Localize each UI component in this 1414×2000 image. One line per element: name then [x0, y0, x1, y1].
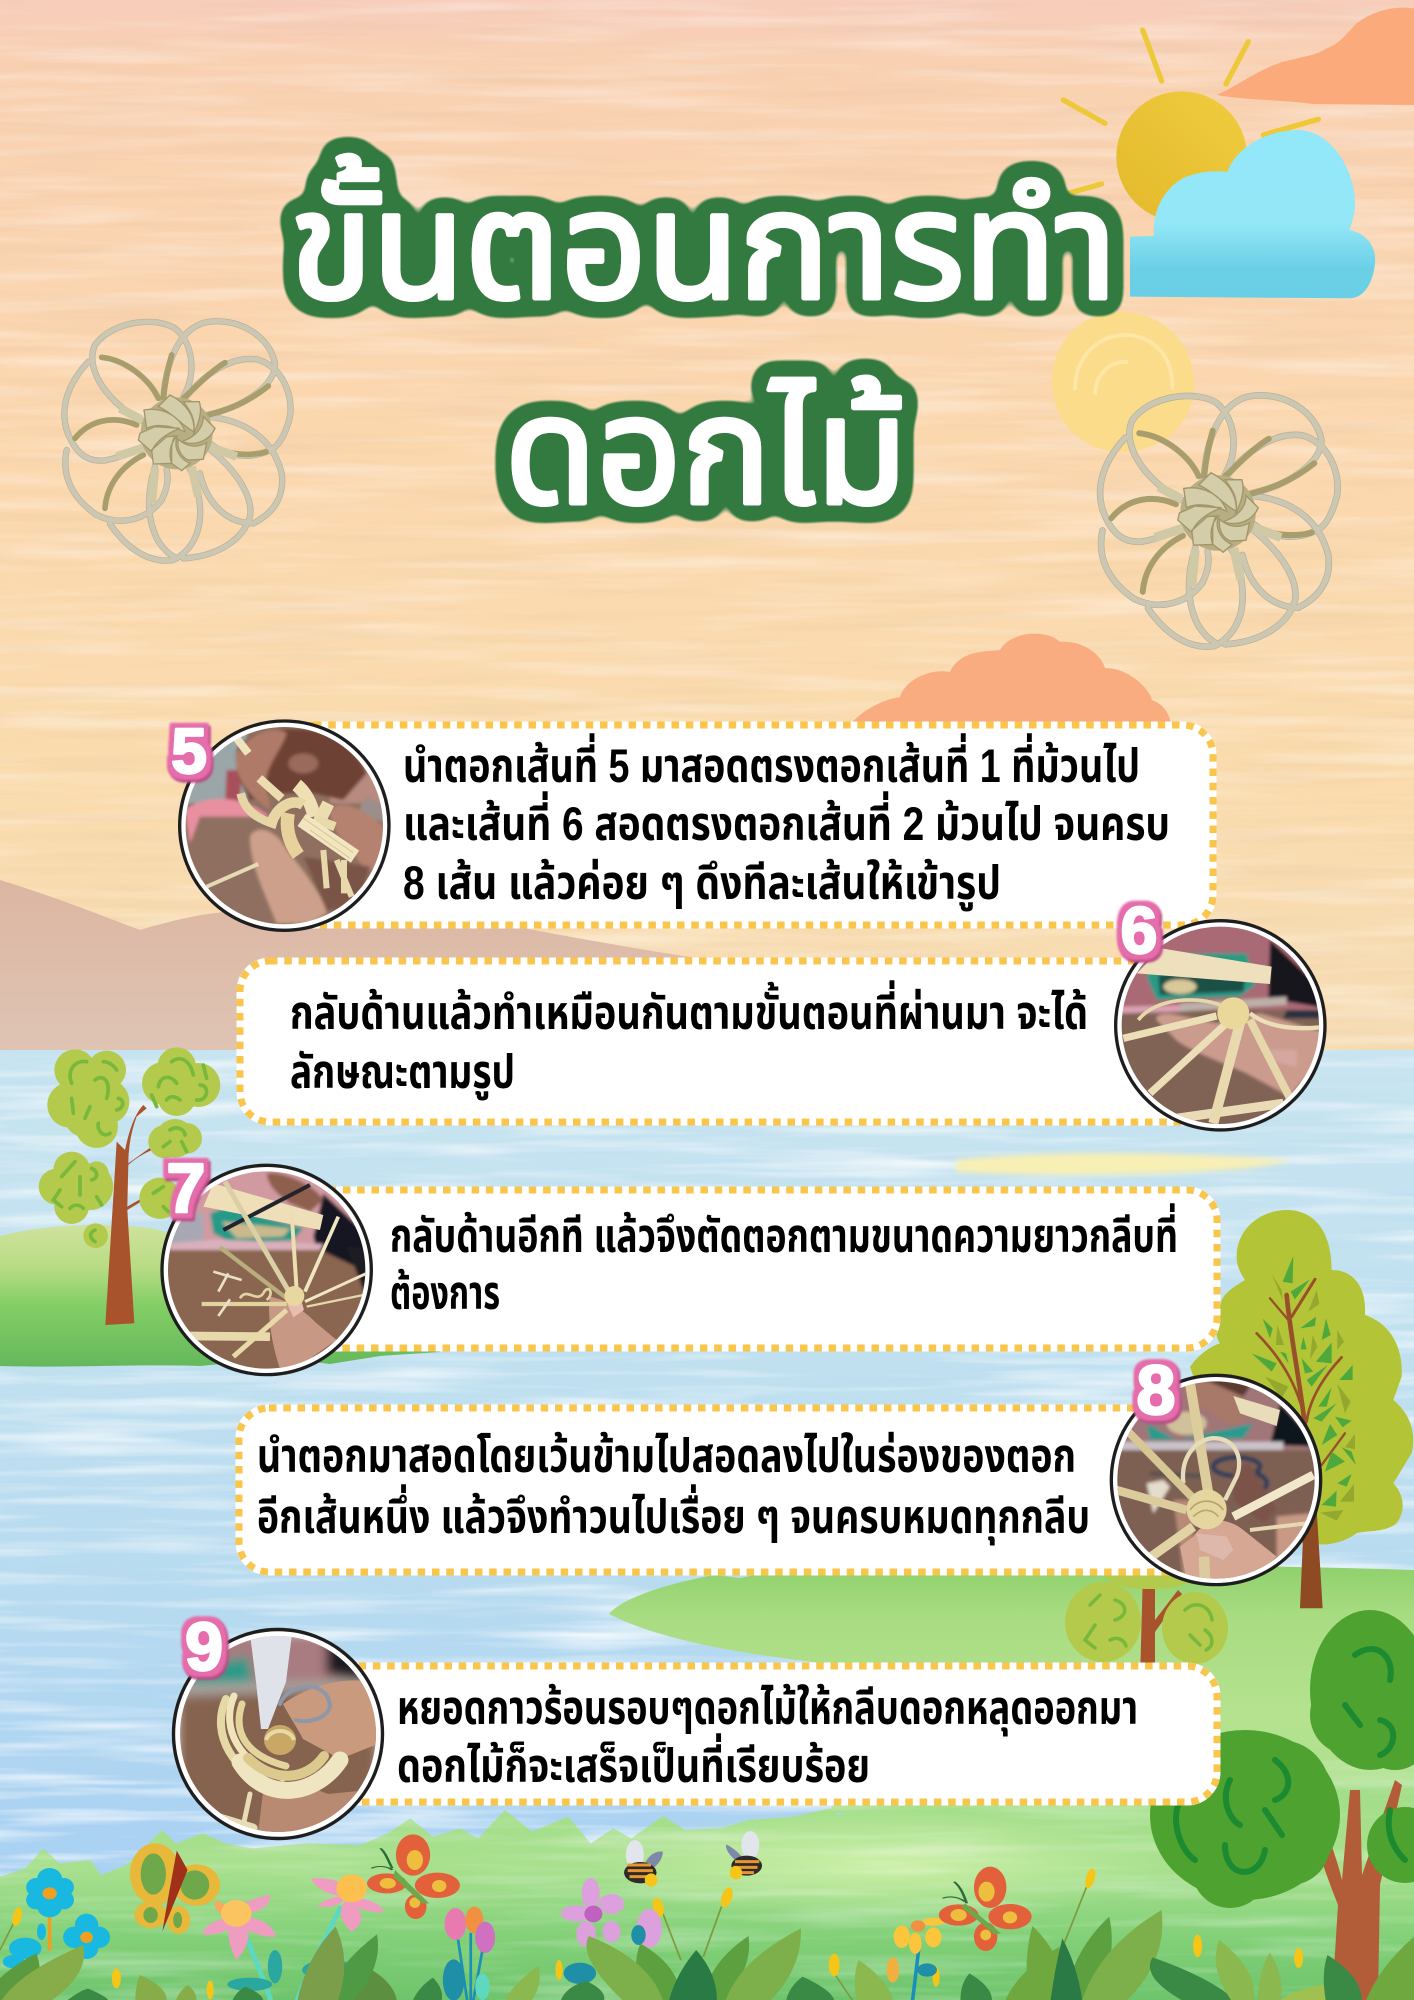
panel: step 6 [240, 961, 1230, 1122]
icon: pale yellow sun [1052, 312, 1194, 452]
step 6 card [240, 961, 1230, 1122]
leaves foreground [0, 1910, 1414, 2000]
panel: step 8 [239, 1408, 1229, 1572]
step 6 text: ลักษณะตามรูป [290, 1045, 515, 1100]
icon: woven flower left [64, 321, 291, 561]
step 5 text [403, 733, 1170, 911]
flower: pink with yellow tulip [311, 1878, 383, 1932]
badge: number 6: 6 [1121, 893, 1157, 967]
photo: step 5 hands weaving [180, 720, 393, 933]
badge: number 7: 7 [167, 1149, 205, 1227]
step 5 text: 8 เส้น แล้วค่อย ๆ ดึงทีละเส้นให้เข้ารูป [403, 856, 1001, 911]
background: right river bank [609, 1565, 1414, 1900]
background: bottom meadow [0, 1780, 1414, 2000]
step 9 text: ดอกไม้ก็จะเสร็จเป็นที่เรียบร้อย [397, 1733, 870, 1792]
yellow spikes [11, 1868, 1303, 1999]
illustration: bottom-right green tree [1150, 1610, 1414, 2000]
background: painted peach sky [0, 0, 1414, 1056]
photo: step 7 cutting strips [160, 1163, 377, 1378]
flowers: tulips [445, 1907, 495, 1953]
background: water brush texture [0, 1050, 1414, 2000]
step 5 card [284, 725, 1213, 925]
photo: step 9 gluing flower [174, 1630, 382, 1838]
texture: land brush strokes [0, 1760, 1414, 2000]
step 7 card [270, 1190, 1217, 1348]
title [290, 155, 1117, 535]
background: pale yellow water streak [956, 1153, 1290, 1175]
flower: yellow [886, 1918, 944, 1983]
step 7 text: กลับด้านอีกที แล้วจึงตัดตอกตามขนาดความยาวกลีบที่ [390, 1203, 1178, 1262]
step 6 text: กลับด้านแล้วทำเหมือนกันตามขั้นตอนที่ผ่านมา จะได้ [290, 980, 1088, 1039]
badge: number 8: 8 [1137, 1351, 1175, 1429]
step 7 text: ต้องการ [390, 1266, 500, 1319]
illustration: right tall tree [1190, 1210, 1413, 1608]
butterfly: orange one [367, 1834, 460, 1919]
title line 2: ดอกไม้ [505, 367, 907, 535]
illustration: small tree behind step 9 [1065, 1561, 1228, 1680]
background: sky brush texture [0, 0, 1414, 1056]
teal leaves [227, 1925, 937, 2000]
background: left river bank [0, 1225, 440, 1367]
panel: step 5 [284, 725, 1213, 925]
illustration: bottom garden [0, 1831, 1414, 2000]
bees [624, 1831, 762, 1887]
flowers: blue [3, 1868, 110, 1968]
background: meadow glow [580, 1810, 1180, 1920]
panel: step 7 [270, 1190, 1217, 1348]
cloud: top-right orange [1217, 8, 1414, 105]
stems and spikes [0, 1887, 1087, 2000]
photo: step 6 flower back [1113, 921, 1327, 1137]
badge: number 9: 9 [185, 1609, 223, 1685]
butterfly: yellow [130, 1843, 220, 1934]
step 8 text [257, 1429, 1090, 1545]
butterfly: orange two [939, 1867, 1032, 1951]
background: distant mountains [0, 880, 960, 1056]
step 8 text: นำตอกมาสอดโดยเว้นข้ามไปสอดลงไปในร่องของตอก [257, 1429, 1076, 1482]
title line 1: ขั้นตอนการทำ [290, 155, 1117, 330]
step 9 text [397, 1681, 1138, 1792]
icon: blue cloud [1130, 130, 1375, 298]
step 5 text: และเส้นที่ 6 สอดตรงตอกเส้นที่ 2 ม้วนไป จนครบ [403, 791, 1170, 850]
step 6 text [290, 980, 1088, 1100]
step 7 text [390, 1203, 1178, 1319]
background: river water [0, 1050, 1414, 2000]
step 9 card [300, 1666, 1217, 1802]
step 5 text: นำตอกเส้นที่ 5 มาสอดตรงตอกเส้นที่ 1 ที่ม้วนไป [403, 733, 1140, 792]
step 8 text: อีกเส้นหนึ่ง แล้วจึงทำวนไปเรื่อย ๆ จนครบหมดทุกกลีบ [257, 1484, 1090, 1545]
flower: purple [561, 1878, 662, 1948]
step 9 text: หยอดกาวร้อนรอบๆดอกไม้ให้กลีบดอกหลุดออกมา [397, 1681, 1138, 1736]
illustration: left tree [39, 1047, 220, 1325]
icon: woven flower right [1100, 395, 1338, 647]
cloud: middle orange [848, 634, 1173, 740]
badge: number 5: 5 [171, 715, 207, 787]
photo: step 8 looping strips [1110, 1373, 1323, 1585]
step 8 card [239, 1408, 1229, 1572]
icon: sun with rays [1063, 30, 1318, 222]
panel: step 9 [300, 1666, 1217, 1802]
flower: pink lily [203, 1895, 275, 1960]
